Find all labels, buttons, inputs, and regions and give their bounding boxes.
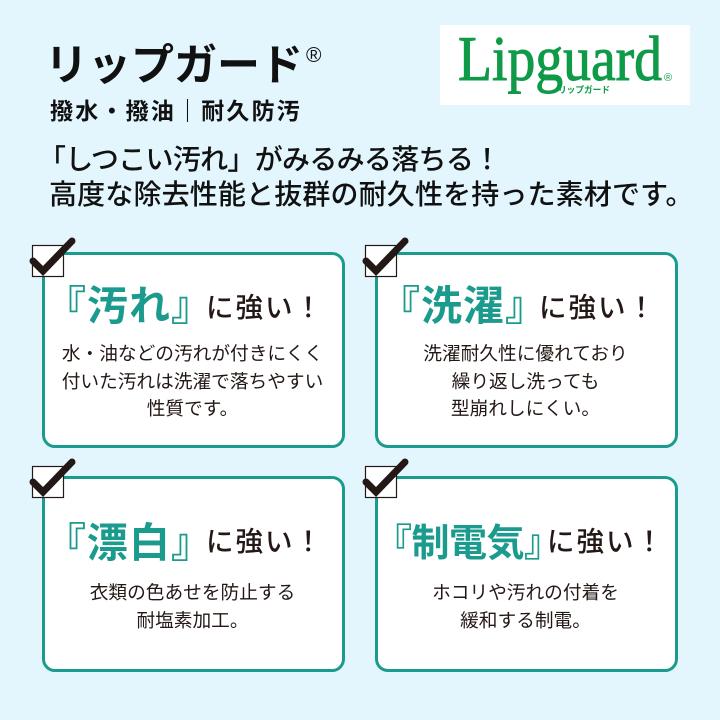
heading suffix: に強い！ [206,519,324,559]
panel: static [375,476,678,672]
body text [62,339,323,421]
body text: 洗濯耐久性に優れており [423,339,628,366]
panel: washing [375,252,678,448]
body text: 耐塩素加工。 [136,606,249,632]
heading: static: 『制電気』 [374,512,562,567]
body text: ホコリや汚れの付着を [432,578,619,605]
panel: bleach [42,476,345,672]
logo: リップガード [558,83,610,96]
title: リップガード [45,31,303,93]
body text [432,578,619,632]
headline: 「しつこい汚れ」がみるみる落ちる！ [38,138,500,178]
headline [38,138,694,213]
body text: 付いた汚れは洗濯で落ちやすい [62,366,323,394]
heading suffix: に強い！ [547,519,665,559]
body text: 繰り返し洗っても [452,366,599,394]
icon: checkbox 3 [30,458,76,498]
subtitle: 撥水・撥油｜耐久防汚 [50,92,302,126]
panel: dirt [42,252,345,448]
registered mark: ® [306,44,321,67]
heading: bleach: 『漂白』 [45,509,213,569]
icon: checkbox 4 [362,458,408,498]
heading suffix: に強い！ [539,285,657,325]
body text: 衣類の色あせを防止する [90,578,295,605]
body text: 性質です。 [147,394,238,421]
heading: dirt: 『汚れ』 [45,272,213,332]
icon: checkbox 2 [362,238,408,278]
heading: washing: 『洗濯』 [379,272,547,332]
body text [423,339,628,421]
headline: 高度な除去性能と抜群の耐久性を持った素材です。 [49,173,694,213]
body text [90,578,295,632]
body text: 緩和する制電。 [460,606,591,632]
body text: 水・油などの汚れが付きにくく [62,339,323,366]
logo: ® [664,72,672,84]
body text: 型崩れしにくい。 [451,394,600,421]
heading suffix: に強い！ [206,285,324,325]
icon: checkbox 1 [30,238,76,278]
